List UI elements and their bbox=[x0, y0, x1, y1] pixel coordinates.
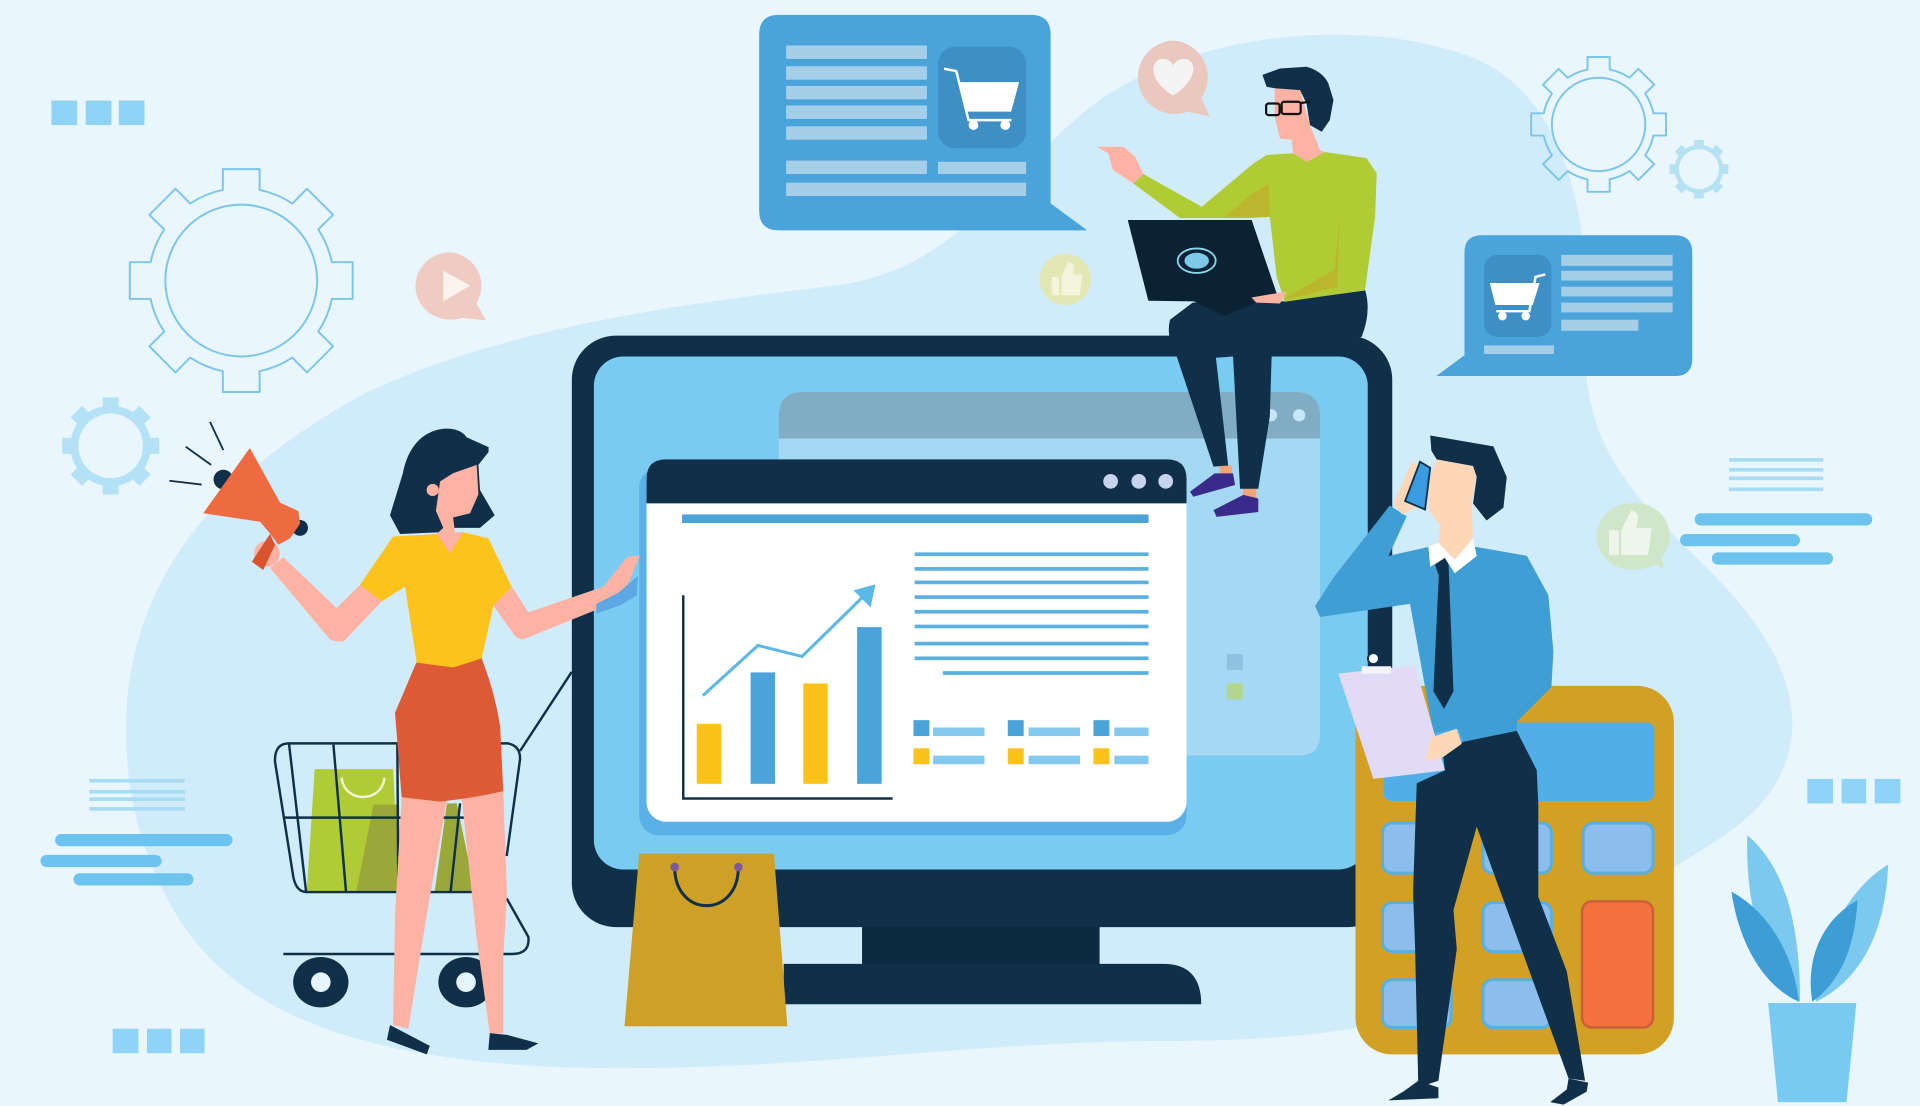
person: man with phone and clipboard bbox=[1315, 435, 1588, 1105]
pointing hand bbox=[1097, 147, 1143, 183]
icon: cart bbox=[944, 69, 1018, 129]
icon: thumbs up right bbox=[1597, 503, 1670, 570]
text lines left bbox=[40, 779, 233, 885]
person: man sitting with laptop bbox=[1097, 67, 1377, 517]
collar bbox=[1428, 538, 1477, 573]
neck and face bbox=[1275, 88, 1325, 162]
phone and hand bbox=[1393, 462, 1420, 514]
arms bbox=[270, 557, 382, 642]
shoes bbox=[1190, 473, 1235, 497]
text lines right bbox=[1680, 458, 1872, 565]
back browser window bbox=[779, 392, 1320, 756]
hand shadow bbox=[596, 576, 638, 614]
glasses bbox=[1266, 102, 1310, 115]
shoes bbox=[1388, 1081, 1438, 1100]
neck and face bbox=[436, 465, 478, 554]
hair bbox=[1262, 67, 1333, 132]
decorative squares top left bbox=[51, 101, 144, 125]
monitor screen bbox=[594, 356, 1368, 870]
decorative squares right bbox=[1807, 779, 1900, 803]
shirt bbox=[360, 532, 512, 667]
green bag in cart bbox=[307, 769, 399, 892]
monitor bbox=[572, 336, 1392, 1004]
hand bbox=[254, 541, 280, 566]
front browser window bbox=[639, 459, 1187, 835]
neck and face bbox=[1428, 459, 1477, 560]
icon: play bubble bbox=[415, 252, 486, 320]
ankles bbox=[1220, 465, 1256, 502]
panel: shopping speech bubble right bbox=[1436, 235, 1692, 376]
legs bbox=[1169, 290, 1368, 489]
legs bbox=[393, 797, 447, 1029]
icon: large gear outline bbox=[130, 169, 353, 392]
bar chart bbox=[683, 584, 893, 799]
text lines in window bbox=[915, 552, 1149, 675]
icon: megaphone bbox=[169, 422, 308, 570]
shopping cart bbox=[275, 672, 572, 1007]
person: woman with megaphone bbox=[169, 422, 640, 1054]
shirt bbox=[1315, 505, 1553, 742]
calculator bbox=[1356, 686, 1674, 1054]
chart legend bbox=[913, 720, 1149, 764]
decorative squares bottom left bbox=[113, 1029, 204, 1053]
skirt bbox=[395, 658, 503, 802]
sweater bbox=[1133, 152, 1377, 302]
icon: small gear top right bbox=[1670, 140, 1728, 199]
hair bbox=[390, 429, 495, 534]
icon: thumbs up small bbox=[1040, 254, 1091, 305]
shoes bbox=[387, 1025, 430, 1054]
icon: small solid gear left bbox=[62, 397, 159, 494]
icon: heart bubble bbox=[1138, 41, 1210, 116]
laptop bbox=[1128, 220, 1277, 316]
hair bbox=[1430, 435, 1507, 521]
trousers bbox=[1413, 731, 1585, 1087]
monitor stand bbox=[862, 919, 1100, 967]
shopping bag bbox=[624, 854, 787, 1026]
icon: gear outline top right bbox=[1531, 57, 1666, 192]
hand on clipboard bbox=[1425, 729, 1462, 761]
plant bbox=[1731, 835, 1888, 1102]
monitor frame bbox=[572, 336, 1392, 927]
panel: shopping speech bubble top bbox=[759, 15, 1087, 230]
icon: cart bbox=[1491, 274, 1545, 319]
tie bbox=[1433, 558, 1453, 709]
clipboard bbox=[1338, 653, 1445, 779]
sweater shadow bbox=[1224, 184, 1340, 301]
